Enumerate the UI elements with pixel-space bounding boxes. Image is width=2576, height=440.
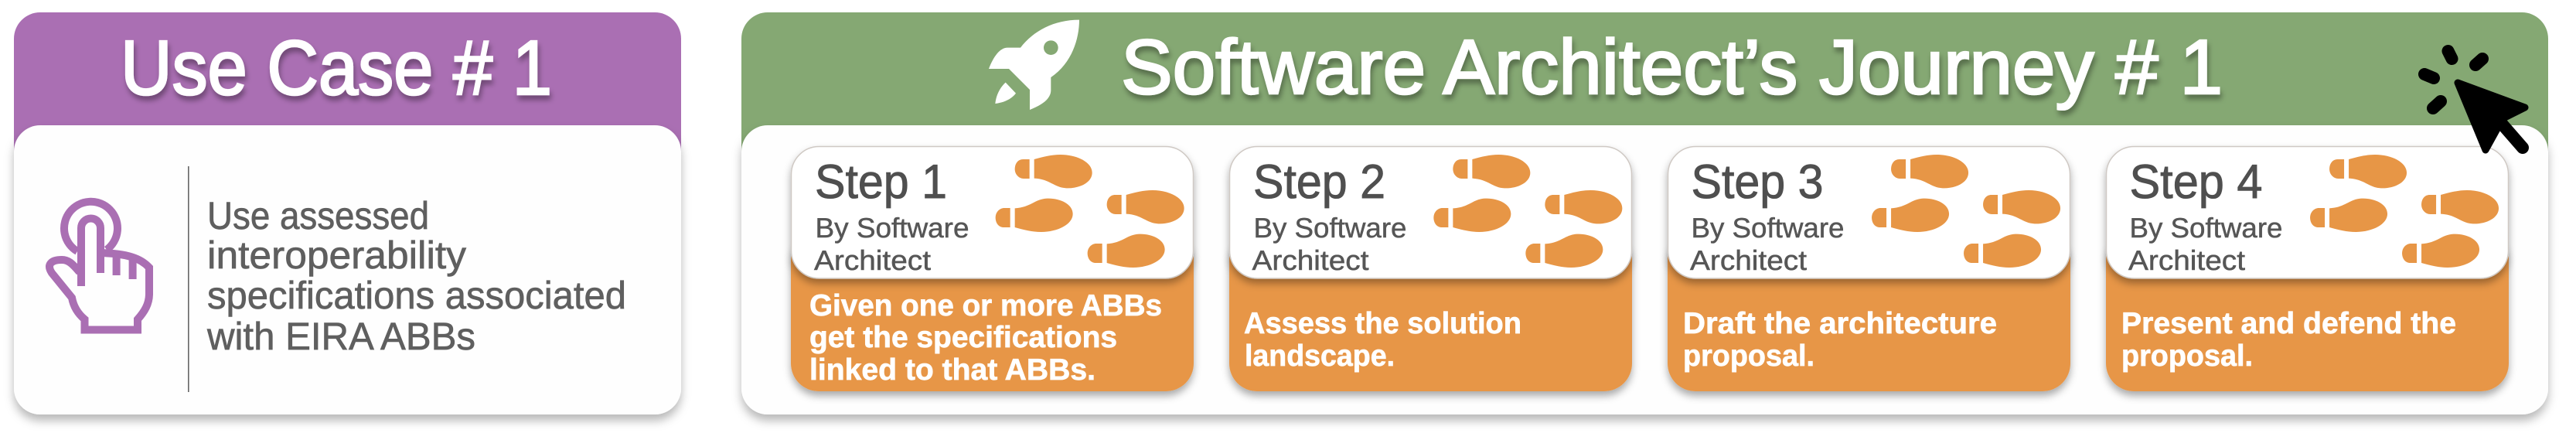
step 2 description: [1244, 307, 1521, 373]
step 3 byline: By Software: [1692, 212, 1845, 244]
panel: use case: [14, 12, 681, 414]
panel: software architect's journey: [741, 12, 2548, 414]
step 4 byline: [2128, 212, 2282, 276]
step 1 byline: By Software: [815, 212, 969, 244]
step 2 byline: Architect: [1252, 244, 1368, 276]
step 3 description: proposal.: [1683, 339, 1814, 373]
icon: footprints: [996, 155, 1184, 268]
step 3: [1668, 147, 2070, 391]
step 4 description: proposal.: [2121, 339, 2253, 373]
step 4 orange card: [2106, 232, 2509, 391]
step 2 byline: By Software: [1254, 212, 1407, 244]
use case description: specifications associated: [207, 274, 626, 317]
use case description: interoperability: [207, 234, 466, 277]
step 3 description: [1683, 307, 1997, 373]
step 3 white header: [1668, 147, 2070, 278]
use case title: Use Case # 1: [121, 25, 552, 111]
step 2 white header: [1229, 147, 1631, 278]
journey header bar: [741, 12, 2548, 182]
step 3 byline: [1690, 212, 1845, 276]
step 1 description: linked to that ABBs.: [809, 353, 1095, 387]
journey white card: [741, 125, 2548, 414]
use case description: [206, 194, 626, 358]
icon: footprints: [1872, 155, 2060, 268]
journey title: Software Architect’s Journey # 1: [1121, 24, 2223, 111]
step 1 byline: [814, 212, 969, 276]
icon: click cursor: [2424, 51, 2525, 150]
step 3 byline: Architect: [1690, 244, 1807, 276]
step 3 orange card: [1668, 232, 2070, 391]
icon: footprints: [1433, 155, 1622, 268]
step 4 byline: Architect: [2128, 244, 2245, 276]
step 4 heading: Step 4: [2129, 155, 2262, 209]
step 4 byline: By Software: [2129, 212, 2282, 244]
step 1 description: get the specifications: [809, 321, 1117, 354]
icon: rocket: [989, 20, 1079, 110]
step 4 description: [2121, 307, 2456, 373]
step 2 heading: Step 2: [1253, 155, 1385, 209]
step 1 description: [809, 289, 1162, 387]
step 2 orange card: [1229, 232, 1632, 391]
use case white card: [14, 125, 681, 414]
divider line: [188, 166, 189, 392]
step 1 orange card: [791, 232, 1194, 391]
step 1 byline: Architect: [814, 244, 931, 276]
step 4 description: Present and defend the: [2121, 307, 2456, 340]
icon: footprints: [2310, 155, 2499, 268]
use case description: with EIRA ABBs: [206, 315, 475, 358]
step 1 heading: Step 1: [815, 155, 947, 209]
step 4 white header: [2106, 147, 2508, 278]
icon: pointing hand: [49, 202, 149, 329]
step 2 description: landscape.: [1245, 339, 1395, 373]
step 2 byline: [1252, 212, 1407, 276]
step 2: [1229, 147, 1632, 391]
step 4: [2106, 147, 2509, 391]
step 2 description: Assess the solution: [1244, 307, 1521, 340]
step 1 white header: [792, 147, 1194, 278]
use case header bar: [14, 12, 681, 182]
use case description: Use assessed: [207, 194, 429, 237]
step 1 description: Given one or more ABBs: [809, 289, 1162, 322]
step 1: [791, 147, 1194, 391]
step 3 description: Draft the architecture: [1683, 307, 1997, 340]
step 3 heading: Step 3: [1692, 155, 1823, 209]
